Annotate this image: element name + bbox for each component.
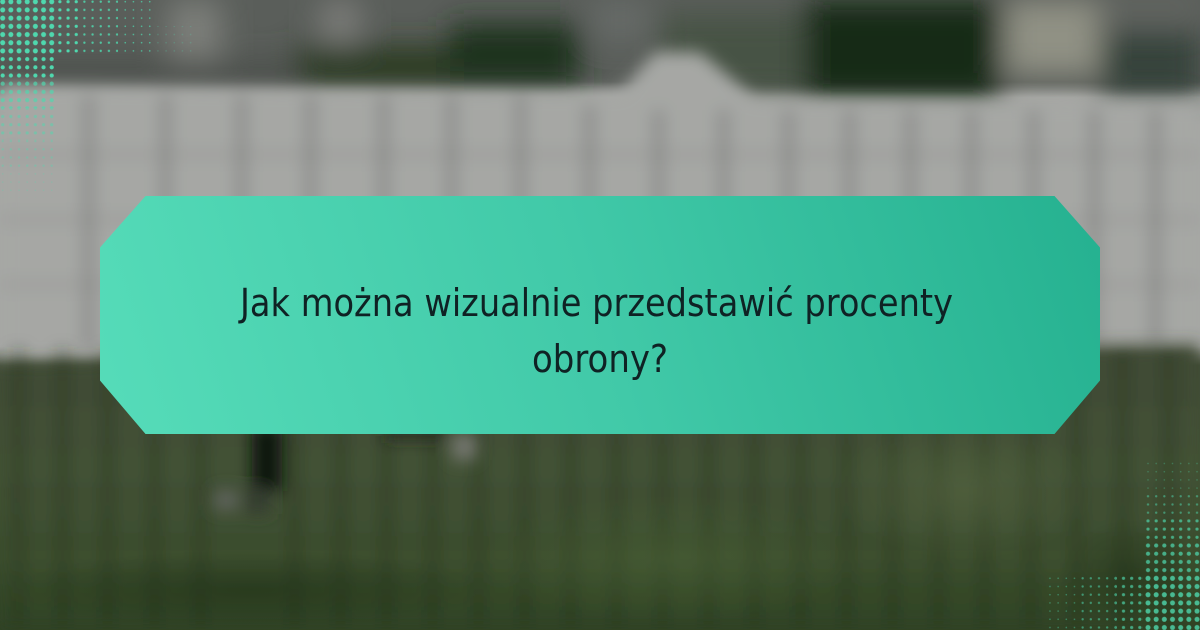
- background: soft light and shade on the grass: [10, 420, 1200, 630]
- background: grass pitch: [0, 345, 1200, 630]
- heading: question: Jak można wizualnie przedstawić procenty: [238, 281, 953, 326]
- background: blurred player legs: [214, 425, 476, 514]
- heading: question: obrony?: [532, 337, 668, 382]
- background: white fence: [0, 52, 1200, 362]
- panel: question card: [100, 196, 1100, 434]
- background: trees and buildings behind the fence: [0, 0, 1200, 100]
- decoration: halftone dots top-left: [0, 0, 192, 198]
- decoration: halftone dots bottom-right: [1045, 462, 1200, 630]
